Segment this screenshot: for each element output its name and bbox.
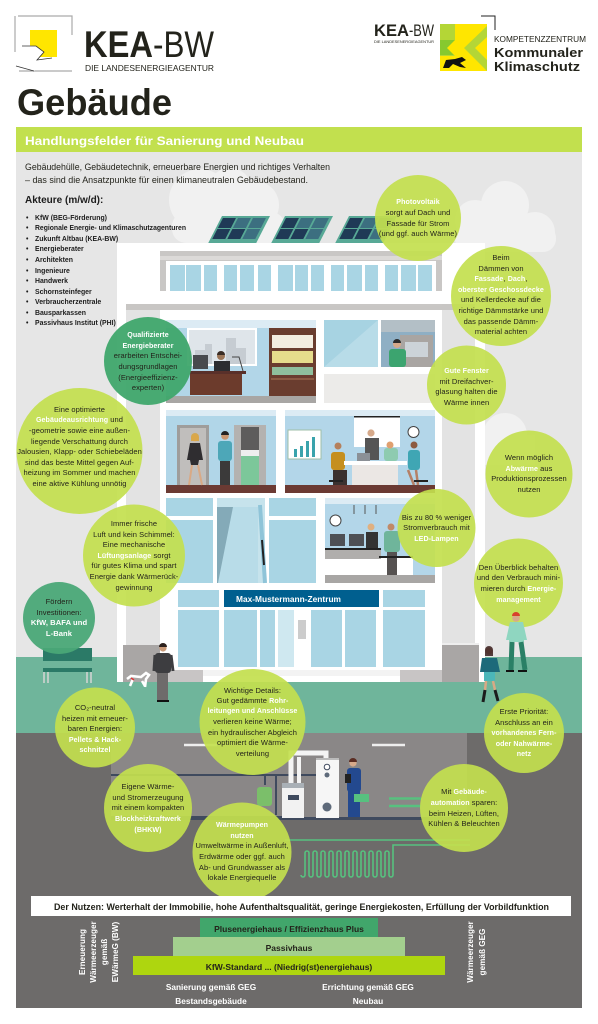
benefit bar: Der Nutzen: Werterhalt der Immobilie, hohe Aufenthaltsqualität, geringe Energiekosten, Erfüllung der Vorbildfunktion xyxy=(54,901,549,912)
callout: Gebäudeausrichtung: Eine optimierte xyxy=(54,405,105,414)
benefit bar xyxy=(31,896,571,916)
list: Akteure: Zukunft Altbau (KEA-BW) xyxy=(35,236,118,243)
basement lamps xyxy=(184,744,405,746)
callout: Wärmepumpen: Umweltwärme in Außenluft, xyxy=(195,841,289,850)
callout: Energiemanagement: Den Überblick behalten xyxy=(479,563,558,572)
callout: Fördern xyxy=(23,582,95,654)
callout: Lüftung: Eine mechanische xyxy=(103,540,165,549)
logo: Kompetenzzentrum Kommunaler Klimaschutz: Klimaschutz xyxy=(494,59,581,74)
callout: Gebäudeautomation: Kühlen & Beleuchten xyxy=(428,819,500,828)
labels: existing buildings: Bestandsgebäude xyxy=(175,996,247,1006)
callout: Photovoltaik: Fassade für Strom xyxy=(387,219,449,228)
callout: Dämmen: und Kellerdecke auf die xyxy=(461,295,541,304)
callout: Gebäudeausrichtung xyxy=(16,388,142,514)
callout: Photovoltaik: (und ggf. auch Wärme) xyxy=(379,229,458,238)
callout: Gebäudeausrichtung: Gebäudeausrichtung und xyxy=(36,415,123,424)
callout: Gebäudeautomation: Mit Gebäude- xyxy=(441,787,487,796)
list: Akteure: • xyxy=(26,289,29,296)
logo: Kompetenzzentrum Kommunaler Klimaschutz: KOMPETENZZENTRUM xyxy=(494,35,586,44)
technician xyxy=(345,758,369,817)
callout: Wichtige Details xyxy=(200,669,306,775)
callout: Photovoltaik: Photovoltaik xyxy=(396,198,440,206)
rotated labels: left: EWärmeG (BW) xyxy=(111,921,120,982)
list: Akteure: • xyxy=(26,225,29,232)
callout: BHKW xyxy=(104,764,192,852)
sign: Max-Mustermann-Zentrum xyxy=(224,590,379,607)
list: Akteure: Regionale Energie- und Klimaschutzagenturen xyxy=(35,225,186,232)
callout: Wärmepumpen xyxy=(192,802,292,902)
list: Akteure: • xyxy=(26,310,29,317)
callout: Fördern: Investitionen: xyxy=(36,608,82,617)
logo: Kompetenzzentrum Kommunaler Klimaschutz: Kommunaler xyxy=(494,45,583,60)
callout: Photovoltaik: sorgt auf Dach und xyxy=(386,208,450,217)
callout: Gebäudeautomation: automation sparen: xyxy=(431,798,497,807)
callout: Gebäudeausrichtung: eine aktive Kühlung unnötig xyxy=(32,479,127,488)
callout: BHKW: mit einem kompakten xyxy=(112,803,184,812)
callout: BHKW: (BHKW) xyxy=(134,826,162,834)
callout: CO2-neutral xyxy=(55,688,135,768)
list: Akteure: • xyxy=(26,320,29,327)
heading band xyxy=(16,127,582,152)
list: Akteure: Bausparkassen xyxy=(35,310,86,317)
callout: Fördern: Fördern xyxy=(46,597,72,606)
callout: Gebäudeausrichtung: heizung im Sommer und machen xyxy=(23,468,136,477)
hot water tank xyxy=(316,758,339,818)
callout: Fördern: KfW, BAFA und xyxy=(31,618,87,627)
list: Akteure: Verbraucherzentrale xyxy=(35,299,101,306)
ground: basement xyxy=(16,733,582,1008)
callout: Dämmen: das passende Dämm- xyxy=(464,317,539,326)
callout: Dämmen: richtige Dämmstärke und xyxy=(459,306,543,315)
callout: BHKW: Blockheizkraftwerk xyxy=(115,815,181,823)
callout: Qualifizierte Energieberater: Qualifizierte xyxy=(127,331,169,339)
callout: Lüftung xyxy=(83,504,185,606)
callout: Dämmen: Dämmen von xyxy=(478,264,524,273)
panel: background xyxy=(16,152,582,1008)
callout: CO2-neutral: schnitzel xyxy=(80,746,110,754)
callout: Wichtige Details: Gut gedämmte Rohr- xyxy=(217,696,289,705)
callout: CO2-neutral: CO₂-neutral xyxy=(75,703,115,712)
labels: new buildings: Neubau xyxy=(353,996,383,1006)
list: Akteure: Ingenieure xyxy=(35,268,70,275)
sign: Max-Mustermann-Zentrum: Max-Mustermann-Zentrum xyxy=(236,594,341,604)
expansion vessel xyxy=(257,787,272,806)
list: Akteure: • xyxy=(26,299,29,306)
list: Akteure: Energieberater xyxy=(35,246,84,253)
callout: Gute Fenster xyxy=(427,346,506,424)
callout: Erste Priorität: Anschluss an ein xyxy=(495,718,553,727)
rotated labels: left: Erneuerung xyxy=(78,929,87,975)
callout: Dämmen: oberster Geschossdecke xyxy=(458,286,544,294)
callout: Wärmepumpen: nutzen xyxy=(230,832,254,840)
standards pyramid: Passivhaus xyxy=(266,943,313,953)
callout: Wichtige Details: verteilung xyxy=(236,749,269,758)
list: Akteure: • xyxy=(26,236,29,243)
callout: Abwärme: Wenn möglich xyxy=(505,453,553,462)
room: upper right xyxy=(324,320,435,403)
callout: Gebäudeautomation: beim Heizen, Lüften, xyxy=(429,809,499,818)
callout: Wichtige Details: optimiert die Wärme- xyxy=(217,738,288,747)
geothermal collector xyxy=(285,840,470,877)
logo: KEA-BW: DIE LANDESENERGIEAGENTUR xyxy=(85,63,214,73)
callout: Lüftung: Lüftungsanlage sorgt xyxy=(98,551,171,560)
labels: existing buildings: Sanierung gemäß GEG xyxy=(166,982,256,992)
rotated labels: left xyxy=(78,920,120,983)
callout: LED: LED-Lampen xyxy=(414,535,459,543)
clouds xyxy=(169,168,556,465)
intro text xyxy=(25,162,330,186)
logo: KEA-BW: -BW xyxy=(153,24,214,65)
callout: Wärmepumpen: Erdwärme oder ggf. auch xyxy=(199,852,285,861)
person with dog xyxy=(127,643,173,702)
room: meeting xyxy=(285,410,435,493)
logo: Kompetenzzentrum Kommunaler Klimaschutz xyxy=(374,16,586,74)
callout: Gebäudeautomation xyxy=(420,764,508,852)
callout: Abwärme: nutzen xyxy=(518,485,540,494)
list: Akteure: • xyxy=(26,278,29,285)
list: Akteure: Akteure (m/w/d): xyxy=(25,195,103,206)
boiler xyxy=(282,783,304,818)
automation lines xyxy=(389,798,421,806)
callout: Energiemanagement: mieren durch Energie- xyxy=(481,584,557,593)
rotated labels: right: Wärmeerzeuger xyxy=(466,920,475,983)
top floor windows xyxy=(170,265,432,291)
callout: Wärmepumpen: Wärmepumpen xyxy=(216,821,268,829)
callout: Dämmen: Beim xyxy=(492,253,510,262)
solar panels xyxy=(208,216,397,243)
callout: Erste Priorität: oder Nahwärme- xyxy=(496,740,553,748)
heating pipes xyxy=(111,753,326,817)
callout: Wichtige Details: ein hydraulischer Abgleich xyxy=(208,728,297,737)
callout: LED xyxy=(398,489,476,567)
room: elevators xyxy=(166,410,276,493)
callout: Qualifizierte Energieberater: Energieberater xyxy=(122,342,174,350)
list: Akteure: • xyxy=(26,268,29,275)
callout: Gebäudeausrichtung: Jalousien, Klapp- oder Schiebeläden xyxy=(17,447,142,456)
callout: Wärmepumpen: lokale Energiequelle xyxy=(208,873,276,882)
rotated labels: left: Wärmeerzeuger xyxy=(89,920,98,983)
callout: Dämmen: material achten xyxy=(475,327,527,336)
list: Akteure: Passivhaus Institut (PHI) xyxy=(35,320,116,327)
building xyxy=(117,243,485,682)
ground floor windows xyxy=(178,590,425,667)
heading band: Handlungsfelder für Sanierung und Neubau xyxy=(25,134,304,148)
callout: Abwärme: Abwärme aus xyxy=(506,464,553,473)
list: Akteure xyxy=(25,195,186,327)
callout: Erste Priorität: vorhandenes Fern- xyxy=(491,729,557,737)
callout: Qualifizierte Energieberater: erarbeiten Entschei- xyxy=(114,351,183,360)
person: man with red hair xyxy=(506,612,527,671)
callout: Gute Fenster: Gute Fenster xyxy=(444,367,489,375)
callout: Erste Priorität: netz xyxy=(517,750,532,758)
labels: new buildings: Errichtung gemäß GEG xyxy=(322,982,414,992)
list: Akteure: • xyxy=(26,215,29,222)
list: Akteure: Architekten xyxy=(35,257,73,264)
callout: Abwärme xyxy=(486,430,572,518)
labels: new buildings xyxy=(322,982,414,1006)
callout: CO2-neutral: Pellets & Hack- xyxy=(69,736,122,744)
labels: existing buildings xyxy=(166,982,256,1006)
callout: Photovoltaik xyxy=(375,175,461,261)
callout: BHKW: und Stromerzeugung xyxy=(112,793,184,802)
standards pyramid xyxy=(133,918,445,975)
intro text: Gebäudehülle, Gebäudetechnik, erneuerbare Energien und richtiges Verhalten xyxy=(25,162,330,173)
list: Akteure: Handwerk xyxy=(35,278,68,285)
callout: Energiemanagement: management xyxy=(496,596,541,604)
windows: third floor xyxy=(166,498,316,583)
callout: Energiemanagement: und den Verbrauch mini- xyxy=(477,573,561,582)
standards pyramid: Plusenergiehaus / Effizienzhaus Plus xyxy=(214,924,364,934)
logo: KEA-BW: KEA xyxy=(84,24,153,65)
list: Akteure: KfW (BEG-Förderung) xyxy=(35,215,107,222)
open window xyxy=(217,505,265,583)
callout: Abwärme: Produktionsprozessen xyxy=(491,474,567,483)
callout: Gebäudeausrichtung: liegende Verschattung durch xyxy=(31,437,128,446)
callout: Lüftung: Luft und kein Schimmel: xyxy=(93,530,175,539)
callout: CO2-neutral: baren Energien: xyxy=(68,724,122,733)
callout: Wichtige Details: verlieren keine Wärme; xyxy=(213,717,292,726)
callout: Lüftung: Immer frische xyxy=(111,519,157,528)
callout: Gute Fenster: Wärme innen xyxy=(444,398,489,407)
callout: Gute Fenster: glasung halten die xyxy=(435,387,498,396)
logo: Kompetenzzentrum Kommunaler Klimaschutz: DIE LANDESENERGIEAGENTUR xyxy=(374,40,434,44)
callout: LED: Stromverbrauch mit xyxy=(403,523,471,532)
rotated labels: right: gemäß GEG xyxy=(478,929,487,975)
entrance steps and side walls xyxy=(123,643,479,682)
callout: Lüftung: gewinnung xyxy=(116,583,152,592)
callout: LED: Bis zu 80 % weniger xyxy=(402,513,472,522)
callout: Erste Priorität: Erste Priorität: xyxy=(500,707,548,716)
callout: CO2-neutral: heizen mit erneuer- xyxy=(62,714,128,723)
logo: Kompetenzzentrum Kommunaler Klimaschutz: KEA xyxy=(374,22,409,40)
list: Akteure: • xyxy=(26,257,29,264)
callout: Lüftung: für gutes Klima und spart xyxy=(91,561,177,570)
intercom xyxy=(298,620,306,639)
callout: Qualifizierte Energieberater xyxy=(104,317,192,405)
callout: Gute Fenster: mit Dreifachver- xyxy=(439,377,494,386)
room: reception xyxy=(325,498,435,583)
callout: Qualifizierte Energieberater: experten) xyxy=(132,383,165,392)
callout: Dämmen: Fassade, Dach, xyxy=(474,274,528,283)
standards pyramid: KfW-Standard ... (Niedrig(st)energiehaus) xyxy=(206,962,372,972)
callout: Gebäudeausrichtung: sind das beste Mittel gegen Auf- xyxy=(25,458,134,467)
callout: Wichtige Details: Wichtige Details: xyxy=(224,686,281,695)
callout: Fördern: L-Bank xyxy=(46,629,73,638)
room: office xyxy=(166,320,316,403)
logo: Kompetenzzentrum Kommunaler Klimaschutz: -BW xyxy=(409,22,434,40)
title: Gebäude xyxy=(17,82,172,123)
callout: Qualifizierte Energieberater: (Energieeffizienz- xyxy=(118,373,178,382)
callout: Gebäudeausrichtung: -geometrie sowie eine außen- xyxy=(29,426,131,435)
callout: Lüftung: Energie dank Wärmerück- xyxy=(90,572,179,581)
rotated labels: left: gemäß xyxy=(100,939,109,965)
logo: KEA-BW xyxy=(15,16,214,73)
list: Akteure: • xyxy=(26,246,29,253)
callout: Qualifizierte Energieberater: dungsgrundlagen xyxy=(118,362,178,371)
callout: BHKW: Eigene Wärme- xyxy=(121,782,175,791)
callout: Energiemanagement xyxy=(474,538,563,628)
callout: Wichtige Details: leitungen und Anschlüsse xyxy=(208,707,297,715)
list: Akteure: Schornsteinfeger xyxy=(35,289,92,296)
person: woman xyxy=(480,646,500,702)
ground: garden xyxy=(16,657,582,733)
bench xyxy=(43,648,92,683)
callout: Wärmepumpen: Ab- und Grundwasser als xyxy=(199,863,285,872)
intro text: – das sind die Ansatzpunkte für einen klimaneutralen Gebäudebestand. xyxy=(25,175,308,186)
callout: Dämmen xyxy=(451,246,551,346)
callout: Erste Priorität xyxy=(484,693,564,773)
rotated labels: right xyxy=(466,920,487,983)
